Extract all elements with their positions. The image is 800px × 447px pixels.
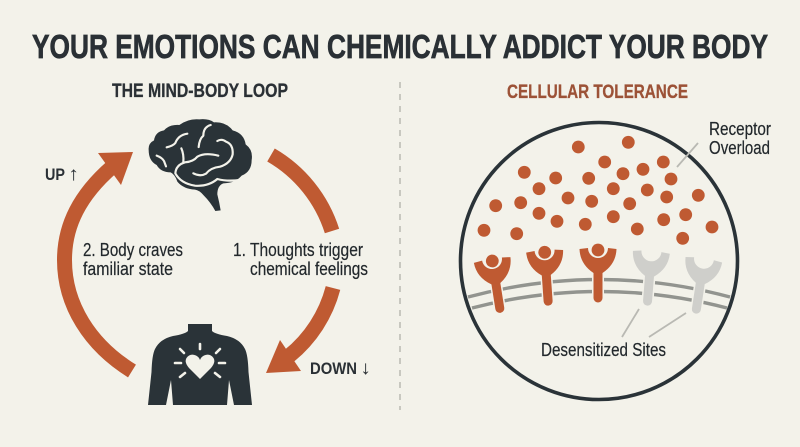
receptor: active 1 — [473, 252, 518, 311]
label: down: ↓ — [360, 358, 371, 379]
circle: cell close-up — [460, 122, 738, 400]
receptor: active 3 — [580, 244, 616, 298]
molecules — [478, 136, 718, 245]
label: down: DOWN — [310, 359, 357, 378]
heading: cellular tolerance: CELLULAR TOLERANCE — [507, 81, 688, 103]
panel: cellular tolerance — [460, 81, 771, 400]
arrow: thoughts down, upper segment — [271, 155, 332, 231]
receptor: desensitized 1 — [629, 250, 670, 303]
label: up — [45, 164, 79, 185]
heading: the mind-body loop: THE MIND-BODY LOOP — [112, 81, 288, 102]
arrow: body up to brain — [64, 152, 133, 371]
text: thoughts trigger chemical feelings — [233, 239, 368, 279]
panel: mind-body loop — [45, 81, 371, 405]
receptor: active 2 — [526, 245, 567, 302]
icon: heart — [186, 355, 214, 379]
membrane — [468, 280, 730, 308]
text: thoughts trigger chemical feelings: 1. Thoughts trigger — [233, 239, 363, 260]
receptor: desensitized 2 — [678, 256, 722, 312]
callout: desensitized sites — [541, 309, 686, 360]
label: up: ↑ — [68, 164, 79, 185]
callout: receptor overload — [677, 119, 771, 167]
icon: body with heart — [148, 324, 252, 405]
label: up: UP — [45, 165, 65, 184]
text: body craves familiar state: familiar state — [83, 258, 173, 279]
icon: brain — [149, 119, 252, 211]
text: body craves familiar state: 2. Body craves — [83, 239, 183, 260]
arrow: thoughts down to body — [266, 288, 333, 373]
text: thoughts trigger chemical feelings: chemical feelings — [250, 258, 368, 279]
callout: desensitized sites: Desensitized Sites — [541, 339, 666, 360]
callout: receptor overload: Overload — [709, 138, 770, 158]
callout: receptor overload: Receptor — [709, 119, 771, 139]
text: body craves familiar state — [83, 239, 183, 279]
